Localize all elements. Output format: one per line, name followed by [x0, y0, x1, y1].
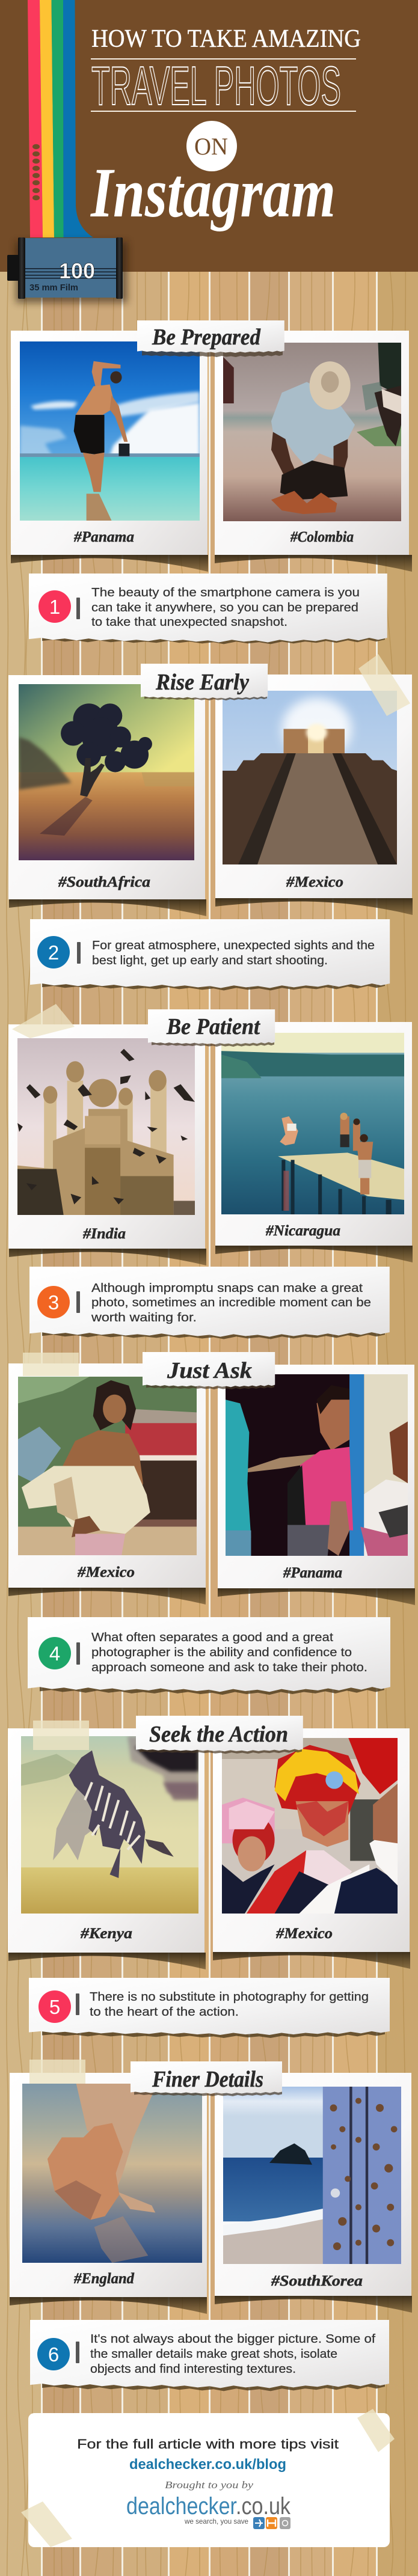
polaroid: england — [10, 2060, 207, 2314]
tip 3 note — [29, 1267, 390, 1339]
tip text: What often separates a good and a great — [91, 1631, 333, 1644]
tape bottom left — [21, 2501, 72, 2547]
polaroid: panama — [11, 331, 208, 572]
tip text: worth waiting for. — [91, 1311, 197, 1324]
caption: #Kenya — [80, 1926, 132, 1942]
tape — [23, 1353, 79, 1376]
section 4: just ask — [8, 1352, 415, 1605]
tip 6 note — [30, 2320, 389, 2391]
number badge: 5 — [49, 1996, 60, 2018]
heading: be prepared — [137, 320, 284, 357]
tip 5 note — [29, 1978, 390, 2038]
tip 2 note — [30, 919, 390, 990]
tip text — [91, 1631, 367, 1674]
heading: rise early — [141, 664, 268, 700]
caption: #England — [73, 2271, 134, 2287]
number badge: 3 — [48, 1291, 59, 1314]
number badge: 1 — [49, 596, 60, 618]
tip text — [91, 1282, 371, 1324]
divider — [76, 598, 80, 619]
footer panel — [21, 2409, 395, 2547]
tape — [358, 654, 410, 716]
heading: seek the action — [136, 1716, 303, 1754]
icon: plane — [253, 2517, 265, 2529]
caption: #Mexico — [275, 1926, 333, 1942]
tip text: It's not always about the bigger picture. Some of — [90, 2333, 375, 2346]
tip text: can take it anywhere, so you can be prepared — [91, 601, 358, 614]
caption: #SouthAfrica — [58, 874, 150, 890]
heading: seek the action: Seek the Action — [149, 1722, 288, 1747]
section 6: finer details — [10, 2060, 412, 2314]
photo: zebras — [21, 1736, 198, 1914]
tip text: best light, get up early and start shooting. — [92, 954, 328, 967]
number badge — [37, 936, 70, 968]
on badge — [186, 121, 237, 171]
heading: finer details — [131, 2061, 282, 2096]
polaroid: south africa — [8, 675, 206, 916]
caption: #Mexico — [286, 874, 343, 890]
tip text: the smaller details make great shots, isolate — [90, 2348, 337, 2361]
polaroid: mexico pyramid — [215, 654, 413, 915]
rule bottom — [91, 111, 356, 112]
tip text: objects and find interesting textures. — [90, 2363, 296, 2376]
tip text: photographer is the ability and confidence to — [91, 1646, 352, 1659]
heading: be patient: Be Patient — [166, 1014, 260, 1039]
rule top — [91, 58, 356, 60]
tape — [29, 2060, 85, 2084]
caption: #Panama — [73, 529, 134, 545]
divider — [76, 1642, 80, 1665]
polaroid: panama woman — [218, 1365, 415, 1605]
section 2: rise early — [8, 654, 413, 916]
tip text: For great atmosphere, unexpected sights and the — [92, 939, 375, 952]
tip text: Although impromptu snaps can make a great — [91, 1282, 363, 1295]
section 5: seek the action — [8, 1716, 410, 1969]
polaroid: india — [8, 1004, 206, 1265]
film speed number: 100 — [59, 259, 95, 283]
tip text: to the heart of the action. — [90, 2005, 239, 2019]
tip 1 note — [29, 574, 387, 644]
polaroid: nicaragua — [215, 1022, 413, 1262]
divider — [77, 942, 81, 964]
tip text — [92, 939, 375, 967]
caption: #Colombia — [290, 529, 354, 545]
film label: 35 mm Film — [29, 283, 78, 293]
divider — [76, 1291, 80, 1313]
on badge: ON — [194, 133, 228, 160]
caption: #SouthKorea — [271, 2273, 363, 2289]
number badge — [38, 1637, 71, 1669]
divider — [76, 2342, 79, 2363]
caption: #Nicaragua — [265, 1223, 340, 1239]
title: instagram: Instagram — [90, 153, 336, 232]
tip text: approach someone and ask to take their photo. — [91, 1661, 367, 1674]
brought to you by: Brought to you by — [165, 2479, 254, 2491]
heading: rise early: Rise Early — [155, 670, 249, 695]
photo: man with coconut — [223, 343, 401, 521]
polaroid: colombia — [215, 331, 412, 572]
polaroid: kenya — [8, 1721, 206, 1969]
section 3: be patient — [8, 1004, 413, 1265]
tip text: The beauty of the smartphone camera is you — [91, 586, 360, 599]
heading: just ask — [143, 1352, 275, 1389]
number badge — [37, 1286, 70, 1318]
tape — [33, 1721, 89, 1750]
title: how to take amazing: HOW TO TAKE AMAZING — [91, 25, 361, 53]
blog link: dealchecker.co.uk/blog — [129, 2456, 286, 2473]
photo: foot on sand — [22, 2084, 202, 2263]
caption: #India — [82, 1226, 126, 1242]
photo: pyramid at sunrise — [223, 691, 397, 864]
number badge — [37, 2338, 70, 2370]
number badge — [38, 1990, 71, 2023]
icon: bed — [266, 2517, 277, 2529]
photo: lake jetty — [221, 1033, 404, 1214]
photo: island and rusty metal — [223, 2087, 401, 2264]
tagline: we search, you save — [184, 2517, 248, 2526]
tip text: There is no substitute in photography for getting — [90, 1990, 369, 2004]
tip text — [91, 586, 360, 629]
photo: masked dancers — [222, 1738, 398, 1914]
caption: #Panama — [283, 1565, 342, 1581]
polaroid: south korea — [215, 2073, 412, 2313]
section 1: be prepared — [11, 320, 412, 572]
heading: be prepared: Be Prepared — [152, 325, 261, 350]
tape top right — [357, 2409, 395, 2452]
number badge: 2 — [48, 941, 59, 964]
call to action: For the full article with more tips visit — [77, 2437, 339, 2452]
number badge: 4 — [49, 1642, 60, 1665]
heading: be patient — [148, 1009, 275, 1047]
caption: #Mexico — [77, 1564, 135, 1580]
photo: woman in doorway — [226, 1374, 408, 1556]
header banner — [0, 0, 418, 272]
tape — [12, 1004, 75, 1038]
film canister — [7, 237, 128, 303]
rainbow stripes — [28, 0, 93, 237]
logo wordmark: dealchecker.co.uk — [126, 2493, 291, 2519]
number badge: 6 — [48, 2343, 59, 2366]
photo: tree at sunrise — [19, 684, 194, 860]
photo: mosque and birds — [17, 1038, 195, 1215]
number badge — [38, 590, 71, 623]
photo: surfer — [18, 1377, 197, 1555]
tip text: photo, sometimes an incredible moment can be — [91, 1296, 371, 1309]
photo: man on log — [20, 341, 200, 521]
tip text — [90, 1990, 369, 2019]
tip text: to take that unexpected snapshot. — [91, 616, 287, 629]
tip 4 note — [28, 1617, 390, 1695]
heading: just ask: Just Ask — [167, 1358, 252, 1383]
divider — [76, 1993, 79, 2015]
tip text — [90, 2333, 375, 2376]
polaroid: mexico dancers — [213, 1728, 410, 1969]
heading: finer details: Finer Details — [152, 2067, 263, 2092]
icon: sun — [280, 2517, 290, 2529]
polaroid: mexico surfer — [8, 1353, 206, 1605]
